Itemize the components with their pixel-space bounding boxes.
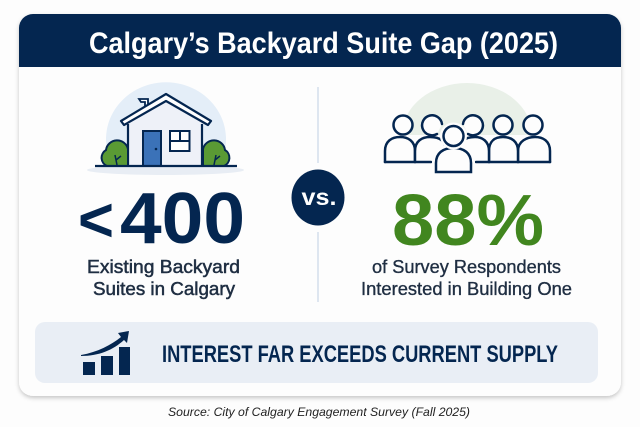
title banner — [19, 14, 621, 67]
vs badge: vs. — [302, 184, 336, 210]
stat label: existing suites: Existing Backyard — [87, 257, 240, 277]
icon: house — [87, 82, 244, 175]
stat: less than 400: < — [78, 186, 114, 255]
stat label: existing suites — [87, 257, 240, 299]
icon: growth chart — [81, 331, 130, 375]
callout banner — [35, 322, 598, 383]
vs badge — [292, 170, 344, 226]
stat label: survey respondents: of Survey Respondents — [372, 257, 561, 277]
icon: people — [385, 83, 550, 172]
icon: right shrub — [203, 140, 229, 166]
stat label: survey respondents: Interested in Building One — [361, 279, 572, 299]
stat: 88 percent: 88% — [392, 181, 544, 261]
stat label: survey respondents — [361, 257, 572, 299]
stat: less than 400: 400 — [120, 179, 245, 259]
icon: left shrub — [102, 140, 128, 166]
source: Source: City of Calgary Engagement Survey (Fall 2025) — [168, 405, 470, 419]
stat label: existing suites: Suites in Calgary — [93, 279, 235, 299]
title: Calgary’s Backyard Suite Gap (2025) — [89, 27, 558, 60]
divider — [317, 87, 319, 302]
